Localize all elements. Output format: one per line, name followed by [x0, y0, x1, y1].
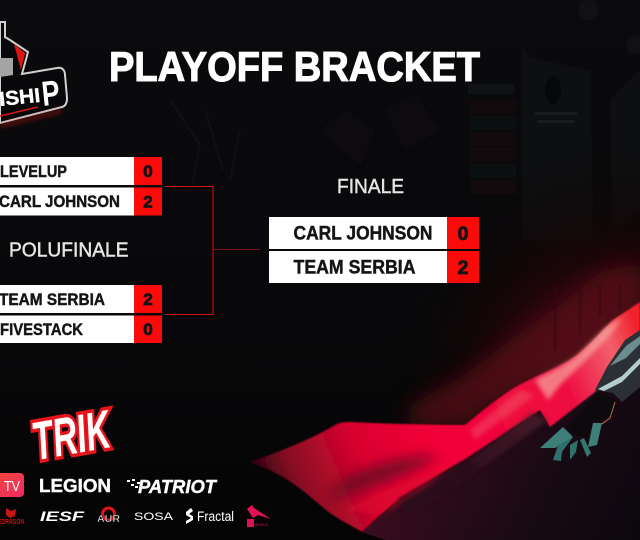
title: PLAYOFF BRACKET: [109, 43, 480, 90]
team row: FiveStack: 0: [143, 320, 153, 339]
team row: LevelUp: 0: [143, 162, 153, 181]
illustration: red flag and hand: [250, 302, 640, 540]
flag highlights and folds: [325, 318, 622, 520]
sponsor: Trik logo: TRIK: [28, 399, 117, 472]
sponsor: TV: TV: [4, 478, 20, 495]
team row: Team Serbia: [0, 285, 162, 313]
team row: Team Serbia: [269, 251, 479, 283]
team row: Carl Johnson: [0, 188, 162, 216]
sponsor: SOSA: SOSA: [134, 511, 174, 523]
label: semifinals: POLUFINALE: [9, 240, 128, 262]
sponsor: IESF: IESF: [40, 508, 85, 524]
sponsor: AUR: AUR: [97, 514, 121, 525]
logo: championship badge: P: [40, 73, 62, 114]
sponsor: Redragon: [0, 508, 24, 526]
match: final: [269, 217, 479, 283]
match: semifinal 1: [0, 157, 162, 216]
sponsor: Fractal: Fractal: [197, 509, 234, 524]
sponsor row 2: [0, 505, 271, 527]
team row: Carl Johnson: 2: [143, 192, 153, 212]
sponsor: pink emblem: WORLD: [255, 523, 268, 527]
sponsor: Patriot: PATRIOT: [138, 477, 218, 497]
label: final: FINALE: [337, 176, 404, 198]
lower dark cloth: [362, 387, 640, 540]
background: red glow behind flag: [330, 130, 640, 540]
team row: Carl Johnson: [269, 217, 479, 249]
team row: Carl Johnson: CARL JOHNSON: [0, 192, 120, 211]
background: hanging banner: [522, 45, 594, 241]
team row: LevelUp: [0, 157, 162, 185]
flag body: [250, 302, 640, 532]
team row: Team Serbia: 2: [143, 290, 153, 309]
bracket connector lines: [165, 186, 260, 314]
logo: championship badge: [0, 22, 67, 126]
team row: FiveStack: FIVESTACK: [0, 320, 84, 339]
team row: LevelUp: LEVELUP: [0, 162, 67, 181]
team row: FiveStack: [0, 316, 162, 343]
sponsor: Fractal: [186, 508, 234, 524]
team row: Team Serbia: TEAM SERBIA: [0, 290, 105, 309]
sponsor: pink emblem: [247, 505, 271, 527]
sponsor: AUR: [97, 508, 121, 525]
match: semifinal 2: [0, 285, 162, 343]
sponsor: TV: [0, 473, 24, 497]
sponsor: Legion: LEGION: [39, 476, 111, 496]
team row: Team Serbia: 2: [458, 257, 469, 279]
hand: [540, 330, 640, 461]
team row: Carl Johnson: 0: [458, 223, 469, 245]
team row: Carl Johnson: CARL JOHNSON: [294, 222, 432, 244]
team row: Team Serbia: TEAM SERBIA: [294, 256, 416, 278]
sponsor row 1: [0, 473, 218, 497]
background: leaderboard screen: [468, 84, 516, 194]
